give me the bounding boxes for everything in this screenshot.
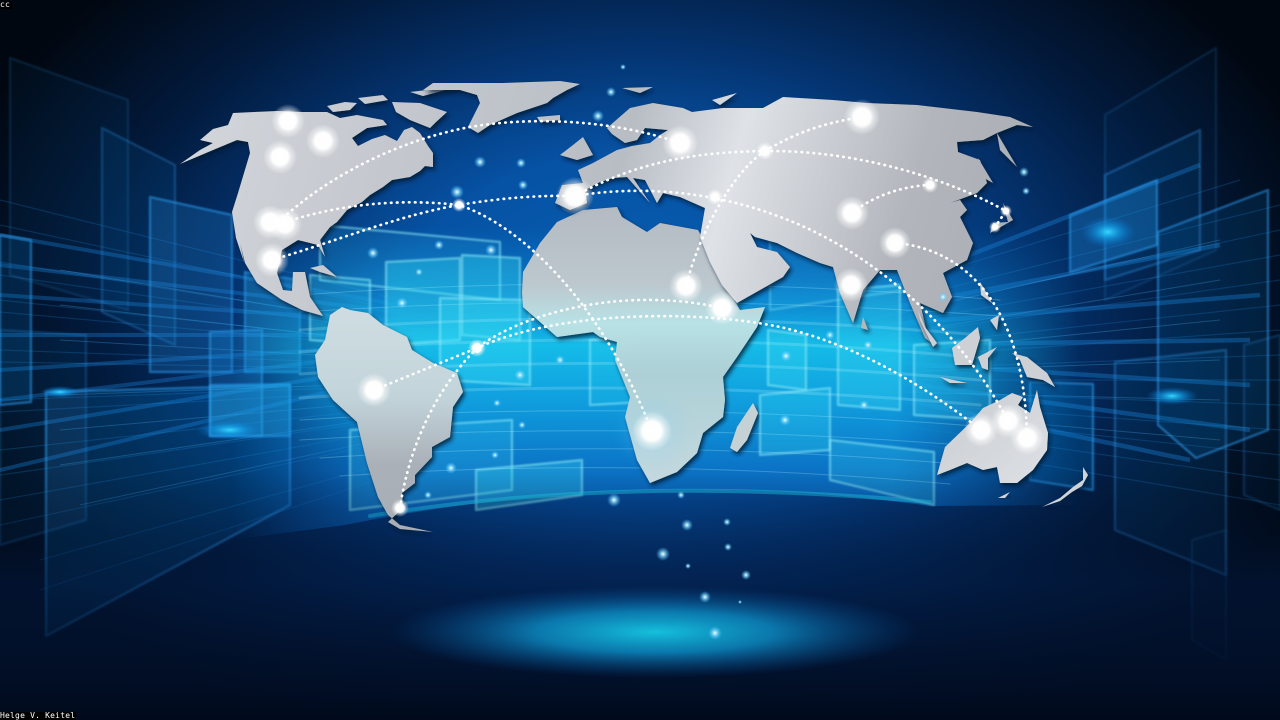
south america <box>315 307 463 532</box>
world map <box>180 81 1088 532</box>
right translucent panels <box>1030 48 1280 660</box>
left light streaks <box>0 200 560 590</box>
credit: author: Helge V. Keitel <box>0 711 75 720</box>
bottom floor shade <box>0 470 1280 720</box>
islands of southeast asia <box>918 282 1055 387</box>
left translucent panels <box>0 58 300 636</box>
horizontal light streaks in band <box>300 284 1000 516</box>
dotted network arcs <box>272 117 1027 508</box>
scattered light particles <box>367 64 1030 640</box>
cyan central light band <box>242 242 1069 537</box>
tasmania <box>998 492 1010 498</box>
soft halo over southern Africa <box>618 397 686 465</box>
central cyan panels <box>310 205 990 510</box>
greenland <box>423 81 580 133</box>
credit: cc: cc <box>0 0 10 9</box>
new zealand <box>1042 467 1088 507</box>
madagascar <box>730 403 758 452</box>
north america <box>180 86 460 316</box>
right light streaks <box>720 165 1280 505</box>
eurasia <box>537 87 1033 347</box>
floor light pool <box>390 586 920 678</box>
network nodes <box>253 99 1044 517</box>
panel light flares <box>40 216 1198 440</box>
africa <box>522 207 765 483</box>
australia <box>937 390 1048 483</box>
